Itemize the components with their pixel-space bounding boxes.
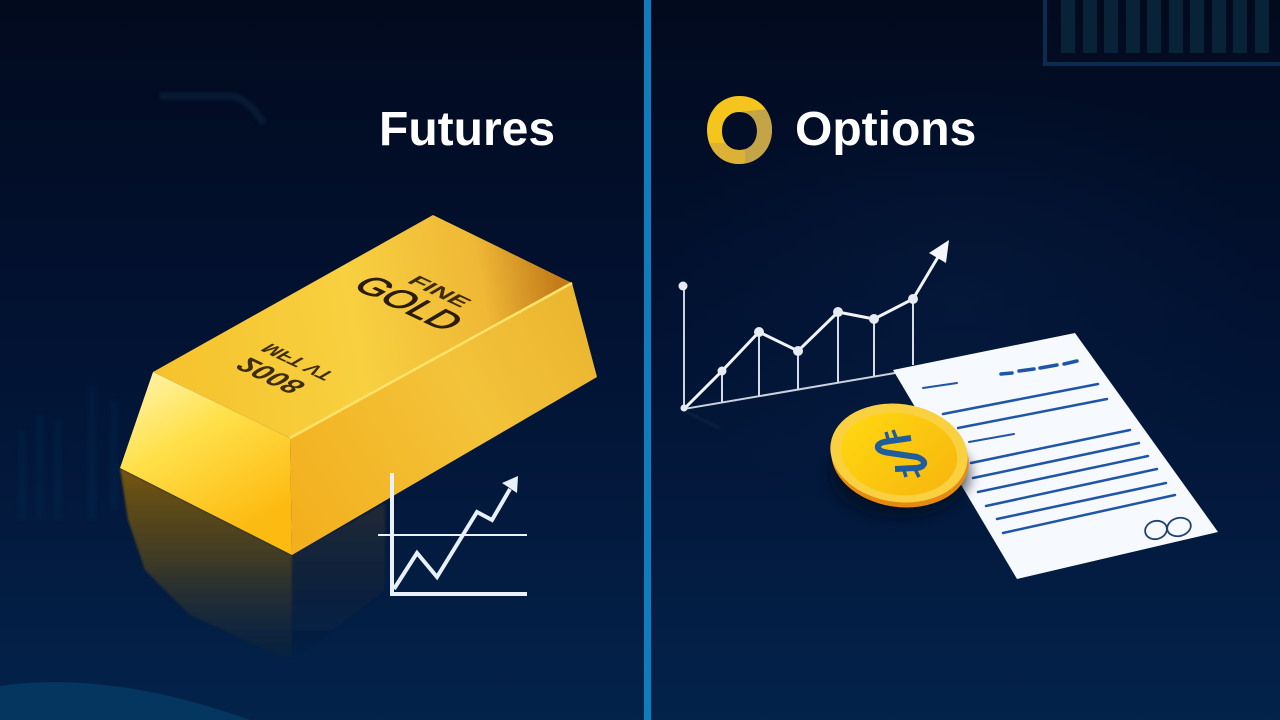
signature <box>1143 515 1193 542</box>
line chart <box>678 240 949 428</box>
document <box>893 333 1218 579</box>
ridge highlight <box>290 283 572 438</box>
coin <box>824 395 975 518</box>
document lines <box>923 361 1175 533</box>
trend line <box>684 252 941 409</box>
icon: gold O logo <box>707 96 772 164</box>
background glow: right <box>660 60 1260 540</box>
top face <box>153 215 572 438</box>
coin rim <box>824 395 974 511</box>
gold bar reflection <box>120 468 385 662</box>
axis shadow <box>686 412 720 428</box>
heading: Options: Options <box>795 103 976 156</box>
paper <box>893 333 1218 579</box>
data points <box>678 282 918 412</box>
front face <box>120 372 292 555</box>
dollar sign <box>878 430 924 477</box>
engraved text: MFT VT: MFT VT <box>256 340 340 383</box>
engraved text: 2008: 2008 <box>229 353 314 397</box>
small chart icon <box>378 473 527 594</box>
faint bars decoration <box>18 385 118 520</box>
drop lines <box>722 299 913 402</box>
background glow: bottom-left arc <box>0 682 250 720</box>
arrow head <box>929 240 949 263</box>
gold bar <box>120 215 597 555</box>
center divider <box>644 0 651 720</box>
coin edge <box>825 400 975 516</box>
faint arrow decoration <box>160 96 264 124</box>
top-right grid decoration <box>1045 0 1280 64</box>
coin face <box>835 405 963 503</box>
right face <box>290 283 597 555</box>
engraved text: GOLD: GOLD <box>344 270 474 336</box>
axes <box>684 288 895 409</box>
heading: Futures: Futures <box>379 103 555 156</box>
engraved text: FINE: FINE <box>402 273 477 311</box>
coin shadow <box>830 430 970 518</box>
